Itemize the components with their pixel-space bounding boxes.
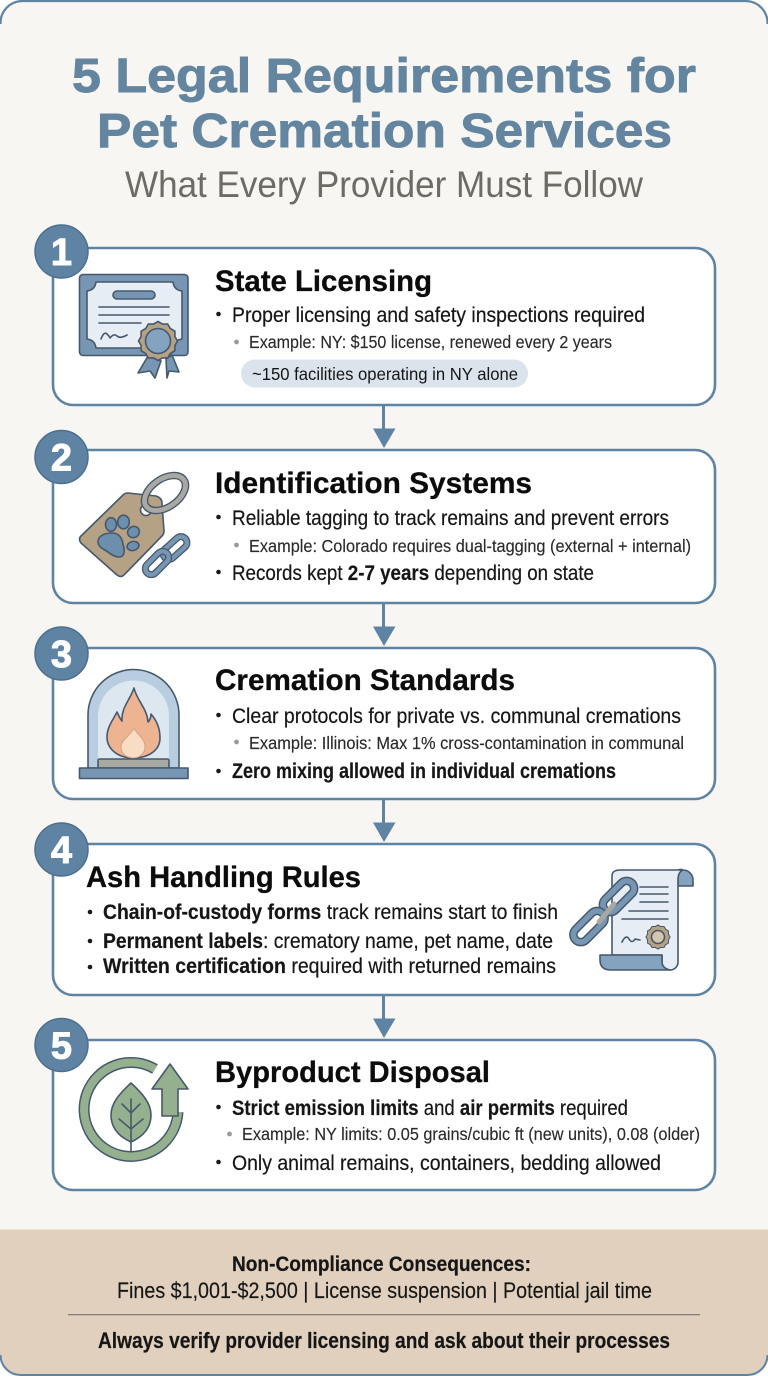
- consequences heading: Non-Compliance Consequences:: [232, 1253, 531, 1276]
- example: Example: NY limits: 0.05 grains/cubic ft (new units), 0.08 (older): [242, 1124, 700, 1144]
- badge 3: 3: [51, 634, 72, 676]
- arrow: step 2 to 3: [373, 602, 396, 646]
- icon: paw tag: [80, 468, 192, 577]
- bullet: Written certification required with returned remains: [103, 954, 556, 978]
- heading: Cremation Standards: [215, 664, 515, 697]
- heading: Identification Systems: [215, 467, 532, 500]
- icon: flame in chamber: [80, 670, 188, 778]
- icon: chain and scroll: [570, 869, 693, 970]
- bullet: Strict emission limits and air permits required: [232, 1096, 628, 1120]
- example: Example: Illinois: Max 1% cross-contamination in communal: [249, 733, 684, 753]
- badge 5: [35, 1018, 88, 1072]
- bullet: Chain-of-custody forms track remains start to finish: [103, 900, 558, 924]
- panel: cremation standards: [35, 627, 715, 799]
- panel: identification systems: [35, 430, 715, 603]
- panel: ash handling rules: [35, 823, 715, 995]
- badge 1: [35, 225, 88, 278]
- footer: consequences band: [0, 1230, 768, 1375]
- example: Example: NY: $150 license, renewed every 2 years: [249, 332, 612, 352]
- bullet: Zero mixing allowed in individual cremations: [232, 759, 616, 783]
- panel: state licensing: [35, 225, 715, 405]
- badge 5: 5: [51, 1026, 72, 1068]
- bullet: Records kept 2-7 years depending on state: [232, 561, 594, 585]
- badge 1: 1: [51, 232, 72, 274]
- closing advice: Always verify provider licensing and ask about their processes: [98, 1328, 670, 1353]
- heading: Byproduct Disposal: [215, 1056, 490, 1089]
- title: Pet Cremation Services: [97, 105, 672, 158]
- example: Example: Colorado requires dual-tagging (external + internal): [249, 536, 691, 556]
- arrow: step 1 to 2: [373, 404, 396, 448]
- panel: byproduct disposal: [35, 1018, 715, 1190]
- icon: leaf recycle: [84, 1062, 188, 1156]
- heading: State Licensing: [215, 265, 432, 298]
- badge 2: [35, 430, 88, 484]
- arrow: step 3 to 4: [373, 798, 396, 842]
- badge 4: [35, 823, 88, 876]
- subtitle: What Every Provider Must Follow: [125, 164, 643, 205]
- badge 4: 4: [51, 830, 72, 872]
- title: [72, 50, 696, 158]
- icon: certificate: [80, 274, 188, 378]
- heading: Ash Handling Rules: [86, 861, 361, 894]
- bullet: Clear protocols for private vs. communal cremations: [232, 704, 681, 728]
- bullet: Permanent labels: crematory name, pet name, date: [103, 929, 553, 953]
- bullet: Reliable tagging to track remains and prevent errors: [232, 506, 669, 530]
- badge 2: 2: [51, 438, 72, 480]
- title: 5 Legal Requirements for: [72, 50, 696, 103]
- callout pill: ~150 facilities operating in NY alone: [252, 364, 518, 384]
- bullet: Only animal remains, containers, bedding allowed: [232, 1151, 661, 1175]
- callout pill: [241, 360, 528, 388]
- arrow: step 4 to 5: [373, 994, 396, 1038]
- consequences list: Fines $1,001-$2,500 | License suspension | Potential jail time: [117, 1278, 652, 1303]
- bullet: Proper licensing and safety inspections required: [232, 303, 645, 327]
- badge 3: [35, 627, 88, 680]
